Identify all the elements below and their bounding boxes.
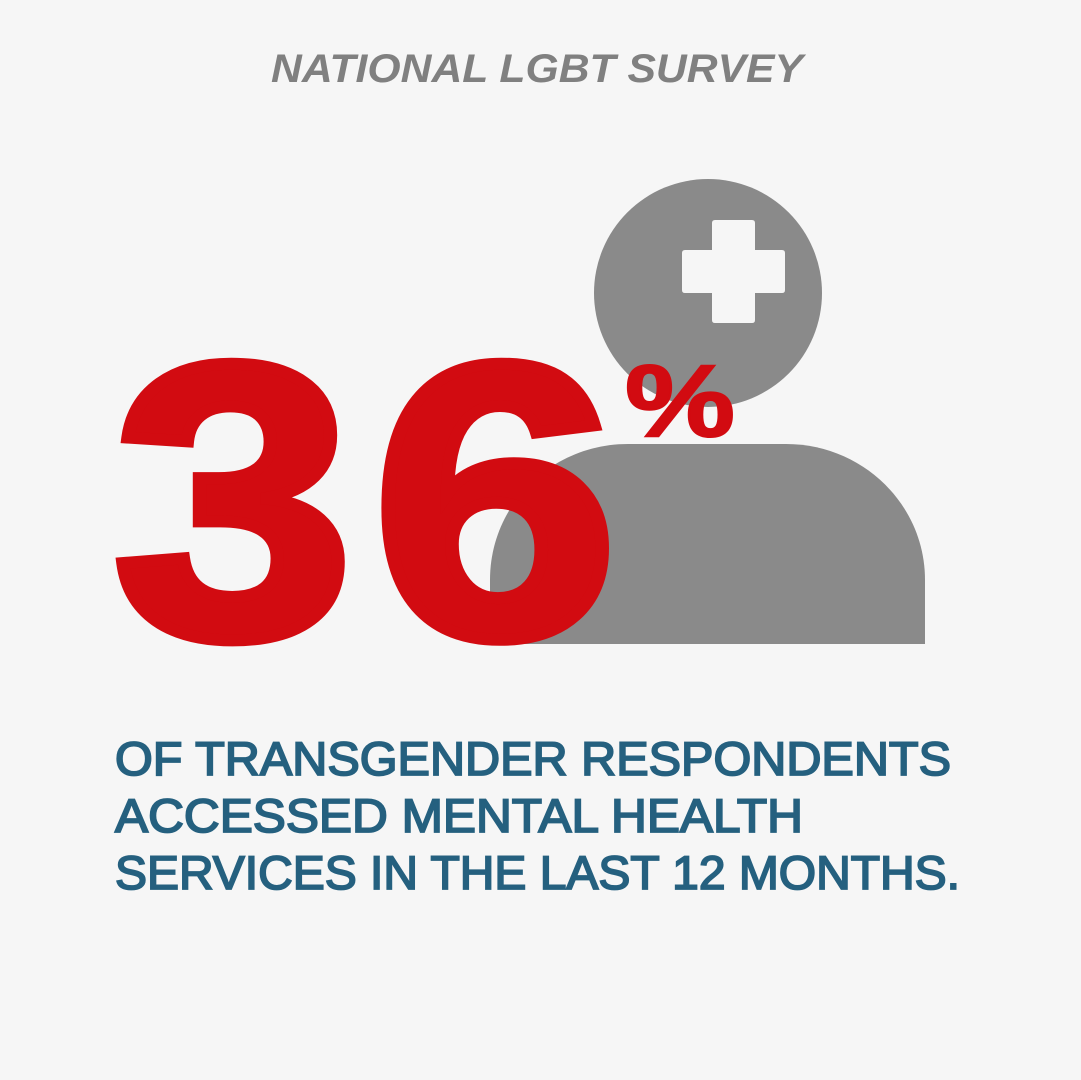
line 1: OF TRANSGENDER RESPONDENTS bbox=[115, 732, 951, 785]
icon: shoulders bbox=[490, 444, 925, 644]
line 3: SERVICES IN THE LAST 12 MONTHS. bbox=[115, 846, 960, 899]
icon: white cross bbox=[682, 220, 785, 323]
icon: head circle bbox=[594, 179, 822, 407]
title: NATIONAL LGBT SURVEY bbox=[271, 47, 807, 91]
description text bbox=[115, 732, 960, 899]
digit 6: 6 bbox=[372, 284, 618, 719]
icon: person with medical cross bbox=[490, 179, 925, 644]
percent sign: % bbox=[625, 344, 735, 458]
line 2: ACCESSED MENTAL HEALTH bbox=[115, 789, 803, 842]
big number 36 bbox=[113, 284, 618, 719]
digit 3: 3 bbox=[113, 284, 354, 719]
